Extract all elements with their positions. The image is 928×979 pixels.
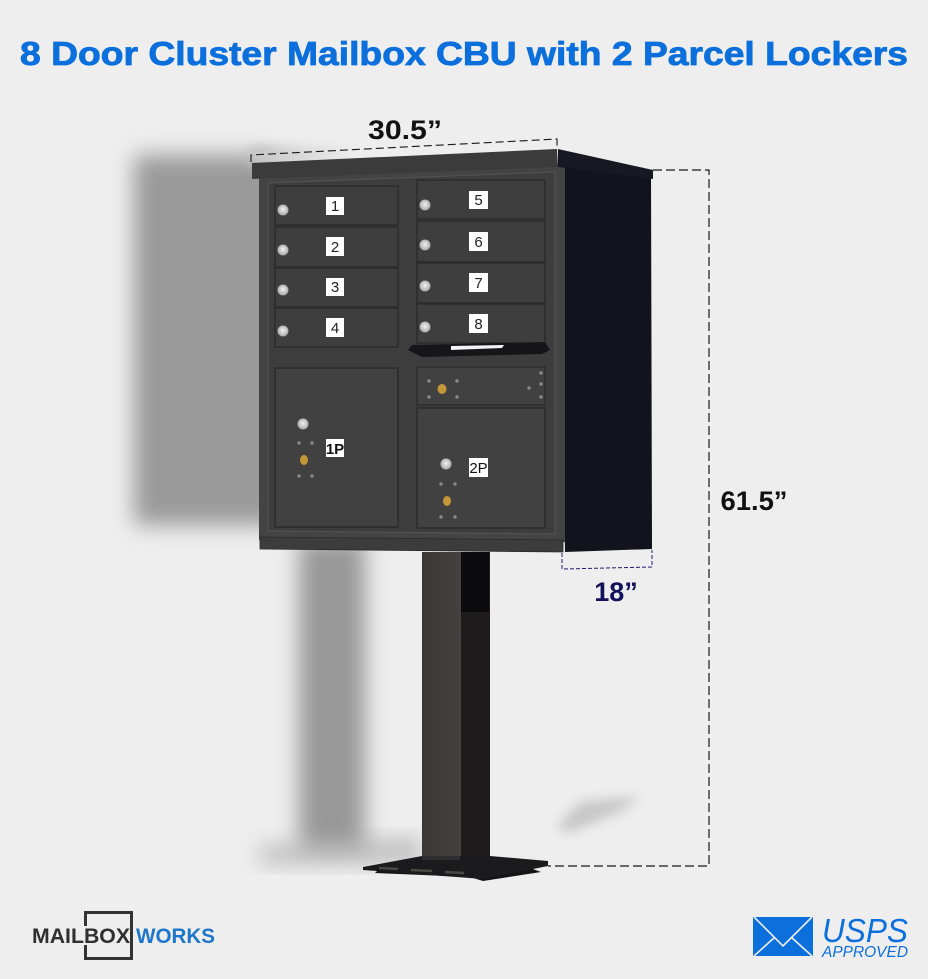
roof top and side (558, 149, 653, 179)
door numbers: 7 (474, 275, 483, 292)
parcel locker 2P: 2P (469, 460, 488, 477)
Mailbox Works logo: MAILBOX (32, 925, 130, 948)
door numbers: 3 (331, 279, 339, 296)
parcel locker 1P (275, 368, 398, 527)
door number plates (326, 191, 488, 337)
Mailbox Works logo: WORKS (136, 925, 215, 948)
left door column (275, 186, 398, 347)
cabinet side panel (558, 160, 652, 552)
Mailbox Works logo (32, 912, 215, 958)
mailbox unit (252, 149, 653, 881)
door 3 (275, 268, 398, 307)
door 1 (275, 186, 398, 225)
roof front (252, 149, 558, 179)
base band (260, 537, 563, 552)
shadow of cabinet on wall (134, 146, 360, 525)
right door column (417, 180, 545, 343)
door numbers: 6 (474, 234, 483, 251)
frame inner recess (268, 172, 555, 534)
door 6 (417, 221, 545, 262)
shadow of post on floor (258, 838, 424, 864)
pedestal base plate (363, 856, 548, 881)
outgoing mail panel (417, 367, 545, 405)
depth dimension line (562, 550, 652, 569)
door numbers: 5 (474, 192, 483, 209)
height label: 61.5” (720, 486, 788, 516)
door 5 (417, 180, 545, 219)
width label: 30.5” (368, 115, 442, 145)
parcel locker 1P: 1P (326, 441, 344, 458)
depth label: 18” (594, 577, 638, 607)
door numbers: 1 (331, 198, 339, 215)
door 4 (275, 308, 398, 347)
icon: envelope (753, 917, 813, 956)
door numbers: 2 (331, 239, 339, 256)
door 2 (275, 227, 398, 267)
width dimension line (251, 139, 557, 162)
outgoing mail slot (408, 342, 550, 357)
USPS approved logo (753, 912, 908, 961)
height dimension line (548, 170, 709, 866)
door numbers (331, 192, 483, 337)
title: 8 Door Cluster Mailbox CBU with 2 Parcel Lockers (20, 35, 908, 72)
door locks (278, 200, 430, 336)
cast shadow near base (556, 796, 640, 832)
door numbers: 4 (331, 320, 339, 337)
pedestal post (422, 552, 490, 861)
door 8 (417, 304, 545, 343)
USPS approved logo: USPS (822, 912, 908, 949)
USPS approved logo: APPROVED (821, 944, 908, 961)
parcel locker 2P (417, 408, 545, 528)
door 7 (417, 263, 545, 303)
door numbers: 8 (474, 316, 483, 333)
cabinet front frame (259, 163, 565, 542)
shadow of post on wall (299, 540, 365, 848)
